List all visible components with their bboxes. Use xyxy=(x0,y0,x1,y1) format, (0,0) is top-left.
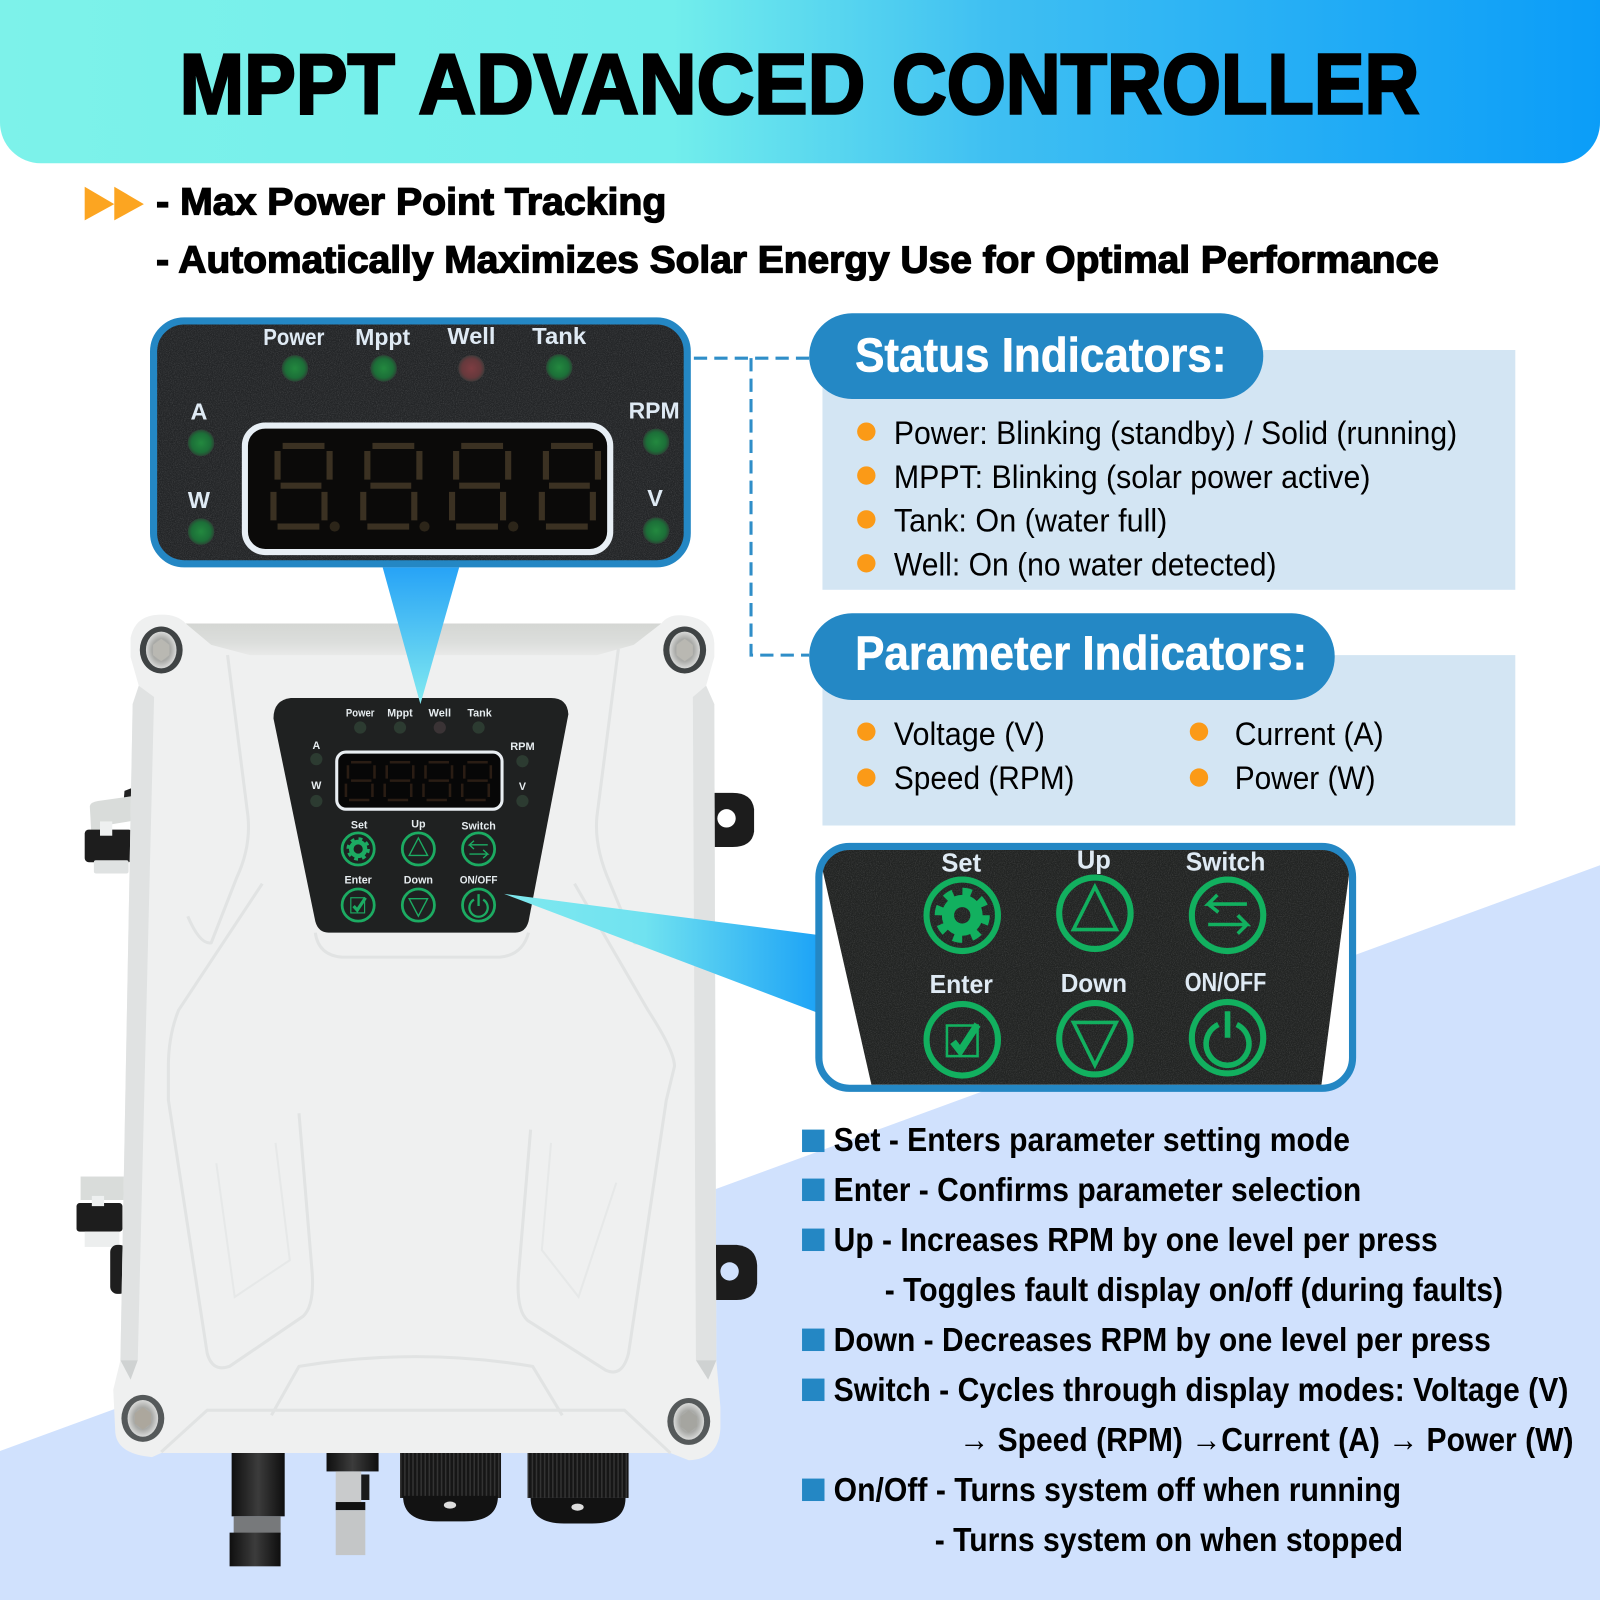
icon: switch button xyxy=(1192,880,1263,951)
device button labels xyxy=(344,819,498,887)
side strips xyxy=(120,686,716,1380)
enlarged status labels: Mppt xyxy=(355,324,410,350)
enlarged status labels: V xyxy=(647,485,663,511)
enlarged button labels: ON/OFF xyxy=(1185,969,1266,997)
title: ADVANCED xyxy=(418,36,865,132)
icon: power button xyxy=(1192,1002,1263,1073)
parameter list: Speed (RPM) xyxy=(894,759,1074,796)
enlarged status labels: Well xyxy=(447,323,495,349)
lid top recess xyxy=(186,623,661,655)
intro text: - Max Power Point Tracking xyxy=(156,180,666,222)
panel border xyxy=(819,846,1353,1088)
status list: Tank: On (water full) xyxy=(894,502,1167,539)
title: CONTROLLER xyxy=(892,36,1419,132)
enlarged status labels: RPM xyxy=(629,397,680,423)
parameter list: Current (A) xyxy=(1235,715,1384,752)
device status labels and LEDs xyxy=(310,707,535,807)
dashed connectors xyxy=(694,358,809,655)
enlarged status labels: A xyxy=(191,398,208,424)
device status labels and LEDs: Tank xyxy=(467,707,492,719)
device status labels and LEDs: Mppt xyxy=(387,707,413,719)
intro text xyxy=(156,180,1439,280)
parameter list: Power (W) xyxy=(1235,759,1376,796)
device status labels and LEDs: RPM xyxy=(510,741,535,753)
button function list: Down - Decreases RPM by one level per press xyxy=(834,1322,1491,1359)
status list xyxy=(857,414,1457,583)
icon: double arrow xyxy=(85,187,144,220)
faint side ribs xyxy=(216,1143,616,1297)
enlarged status labels xyxy=(188,323,680,513)
button function list xyxy=(802,1122,1573,1559)
title xyxy=(180,36,1419,132)
enlarged button labels: Switch xyxy=(1186,848,1265,876)
status list: Well: On (no water detected) xyxy=(894,546,1277,583)
button function list: Up - Increases RPM by one level per press xyxy=(834,1222,1438,1259)
enlarged LEDs xyxy=(188,354,669,545)
enlarged button labels xyxy=(930,846,1266,999)
icon: set button xyxy=(927,880,998,951)
bottom cable connectors xyxy=(230,1449,629,1566)
enlarged status labels: Power xyxy=(263,324,324,350)
button function list: Set - Enters parameter setting mode xyxy=(834,1122,1350,1159)
enlarged status labels: Tank xyxy=(532,323,587,349)
button function list: - Turns system on when stopped xyxy=(935,1522,1403,1559)
title: MPPT xyxy=(180,36,395,132)
icon: down button xyxy=(1059,1003,1131,1074)
device buttons xyxy=(342,833,495,921)
parameter list: Voltage (V) xyxy=(894,715,1045,752)
corner screws xyxy=(121,627,710,1445)
icon: up button xyxy=(1059,878,1131,949)
status heading: Status Indicators: xyxy=(855,329,1227,382)
status list: Power: Blinking (standby) / Solid (running) xyxy=(894,414,1457,451)
enlarged button labels: Enter xyxy=(930,971,993,999)
enlarged button labels: Up xyxy=(1077,846,1111,874)
device display xyxy=(337,752,502,809)
button function list: - Toggles fault display on/off (during faults) xyxy=(885,1272,1503,1309)
device button labels: ON/OFF xyxy=(460,875,498,887)
panel: status indicators xyxy=(809,313,1515,590)
device status labels and LEDs: A xyxy=(312,740,320,752)
device button labels: Down xyxy=(404,875,433,887)
mounting brackets xyxy=(77,786,757,1300)
panel: enlarged buttons xyxy=(819,846,1353,1088)
device status labels and LEDs: Well xyxy=(429,707,451,719)
enlarged button labels: Set xyxy=(941,849,982,877)
enlarged status labels: W xyxy=(188,487,211,513)
button function list: On/Off - Turns system off when running xyxy=(834,1472,1401,1509)
enlarged button labels: Down xyxy=(1061,970,1127,998)
device button labels: Enter xyxy=(344,875,372,887)
device status labels and LEDs: W xyxy=(311,780,322,792)
enclosure shell and lid xyxy=(113,615,720,1460)
parameter list xyxy=(857,715,1384,796)
device button labels: Up xyxy=(411,819,426,831)
status heading pill xyxy=(809,313,1263,399)
icon: enter button xyxy=(927,1004,998,1076)
parameter heading: Parameter Indicators: xyxy=(855,627,1307,680)
enlarged seven segment display xyxy=(245,426,610,552)
control panel on device xyxy=(273,698,568,933)
intro text: - Automatically Maximizes Solar Energy Use for Optimal Performance xyxy=(156,238,1439,280)
panel: parameter indicators xyxy=(809,613,1515,826)
device status labels and LEDs: V xyxy=(519,781,527,793)
header banner xyxy=(0,0,1600,163)
panel: enlarged display xyxy=(154,321,687,564)
controller enclosure xyxy=(77,615,757,1566)
callout wedge to status panel xyxy=(383,567,459,704)
device button labels: Switch xyxy=(461,821,496,833)
device status labels and LEDs: Power xyxy=(346,707,374,719)
parameter heading pill xyxy=(809,613,1335,700)
device button labels: Set xyxy=(351,820,368,832)
lid contour lines xyxy=(161,649,674,1453)
callout wedge to button panel xyxy=(504,894,816,1012)
status list: MPPT: Blinking (solar power active) xyxy=(894,458,1370,495)
button function list: Enter - Confirms parameter selection xyxy=(834,1172,1361,1209)
background diagonal blue area xyxy=(0,865,1600,1600)
black button plate xyxy=(822,850,1350,1085)
